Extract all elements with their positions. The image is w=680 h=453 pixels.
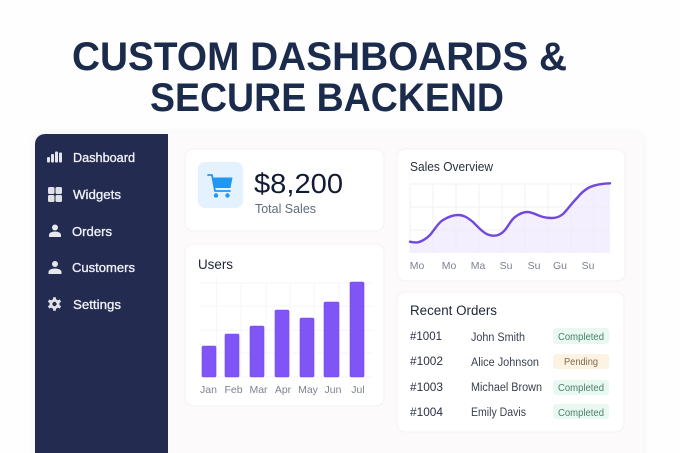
icon: settings gear [49,297,60,311]
order row 1002: Pending [564,357,598,368]
line chart: Su [528,260,541,272]
order row 1002: #1002 [410,356,443,368]
bar chart: Jun [325,384,342,396]
bar chart: Jan [200,384,217,396]
order row 1001: John Smith [471,332,525,344]
line chart: Su [582,260,595,272]
bar chart: Mar [249,384,268,396]
icon: customers person [48,261,62,274]
order row 1001 [410,328,609,344]
line chart: Mo [442,260,456,272]
icon: widgets [48,187,62,202]
icon: dashboard bars [47,152,62,162]
nav item: Widgets: Widgets [73,187,122,202]
order row 1001: #1001 [410,331,442,343]
line chart: Gu [553,260,567,272]
line chart: Ma [471,260,485,272]
title [72,35,567,120]
order row 1002: Alice Johnson [471,357,539,369]
order row 1004: #1004 [410,407,444,419]
heading: sales overview: Sales Overview [410,160,494,174]
line chart [410,183,610,272]
order row 1004: Completed [558,408,604,419]
nav item: Dashboard: Dashboard [73,150,135,165]
nav item: Settings: Settings [73,297,121,312]
bar chart: Apr [275,384,292,396]
nav item: Customers: Customers [72,260,135,275]
icon: shopping cart [198,162,243,208]
panel: total sales [185,149,384,231]
heading: recent orders: Recent Orders [410,303,497,318]
panel: users [185,244,384,406]
icon: orders person [49,224,61,237]
bar chart [199,278,372,396]
order row 1003: #1003 [410,382,443,394]
line chart: Mo [410,260,424,272]
order row 1003 [410,380,609,395]
title: CUSTOM DASHBOARDS & [72,35,567,79]
bar chart: May [298,384,319,396]
stat label: Total Sales [255,201,316,216]
panel: sidebar [35,134,168,453]
order row 1001: Completed [558,332,604,343]
bar chart: Feb [224,384,243,396]
bar chart: Jul [351,384,365,396]
order row 1003: Completed [558,383,604,394]
panel: dashboard window [35,133,643,453]
stat value: $8,200 [254,168,343,199]
title: SECURE BACKEND [150,76,504,120]
heading: users: Users [198,257,233,272]
order row 1002 [410,354,609,369]
line chart: Su [500,260,513,272]
panel: recent orders [397,292,624,432]
order row 1004: Emily Davis [471,407,526,419]
panel: sales overview [397,149,625,281]
nav item: Orders: Orders [72,224,112,239]
order row 1003: Michael Brown [471,382,542,394]
order row 1004 [410,404,609,419]
